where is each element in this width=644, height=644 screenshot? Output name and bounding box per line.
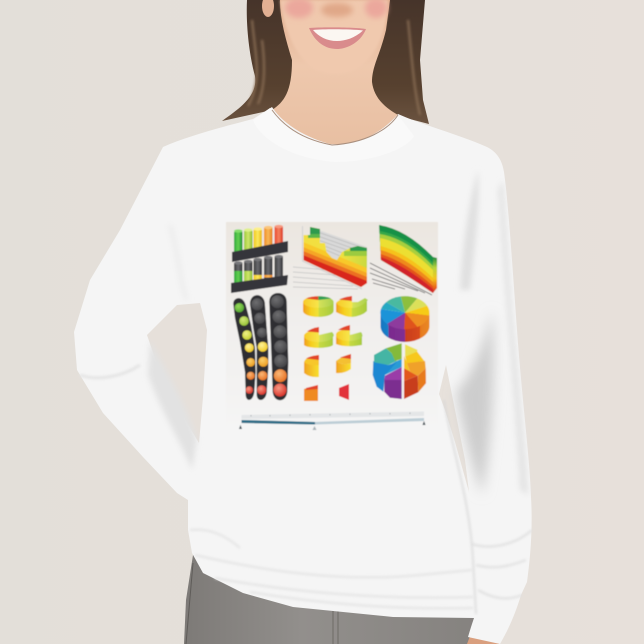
full 3D pie: [380, 296, 430, 342]
face and neck: [262, 0, 400, 146]
pie piece 4: [336, 325, 363, 346]
right sleeve shadows: [456, 310, 494, 495]
left sleeve shadows: [148, 340, 197, 470]
collar: [253, 108, 414, 162]
hand: [467, 636, 500, 644]
tray: [232, 241, 288, 262]
pie piece 2: [336, 296, 368, 317]
pie piece 1: [303, 296, 334, 317]
jeans: [184, 555, 478, 644]
cuff folds: [472, 530, 532, 598]
stacked bands: [302, 226, 368, 288]
capsule gauge 2: [250, 295, 268, 400]
tube chart: upper row: [232, 225, 288, 262]
pie piece 5: [304, 355, 319, 377]
gap between right arm and torso: [439, 365, 469, 492]
curved area chart: [370, 225, 437, 295]
printed graphic panel: [226, 222, 438, 432]
pie piece 6: [336, 354, 351, 373]
pie piece 7: [304, 385, 318, 401]
capsule gauge 3: [269, 293, 288, 400]
hem folds: [190, 530, 473, 608]
tube chart: lower row: [231, 255, 288, 293]
tray: [231, 275, 288, 293]
long-sleeve shirt: [74, 107, 532, 644]
smile: [309, 27, 366, 49]
exploded 3D pie: [373, 343, 426, 399]
hair: [222, 0, 429, 124]
stepped area chart: [293, 226, 368, 290]
pie piece 8: [339, 384, 349, 400]
product photo scene: [74, 0, 532, 644]
capsule gauge 1: [233, 298, 256, 400]
gap between left arm and torso: [147, 303, 207, 443]
pie piece 3: [304, 327, 334, 348]
ruler timeline: [239, 412, 426, 430]
